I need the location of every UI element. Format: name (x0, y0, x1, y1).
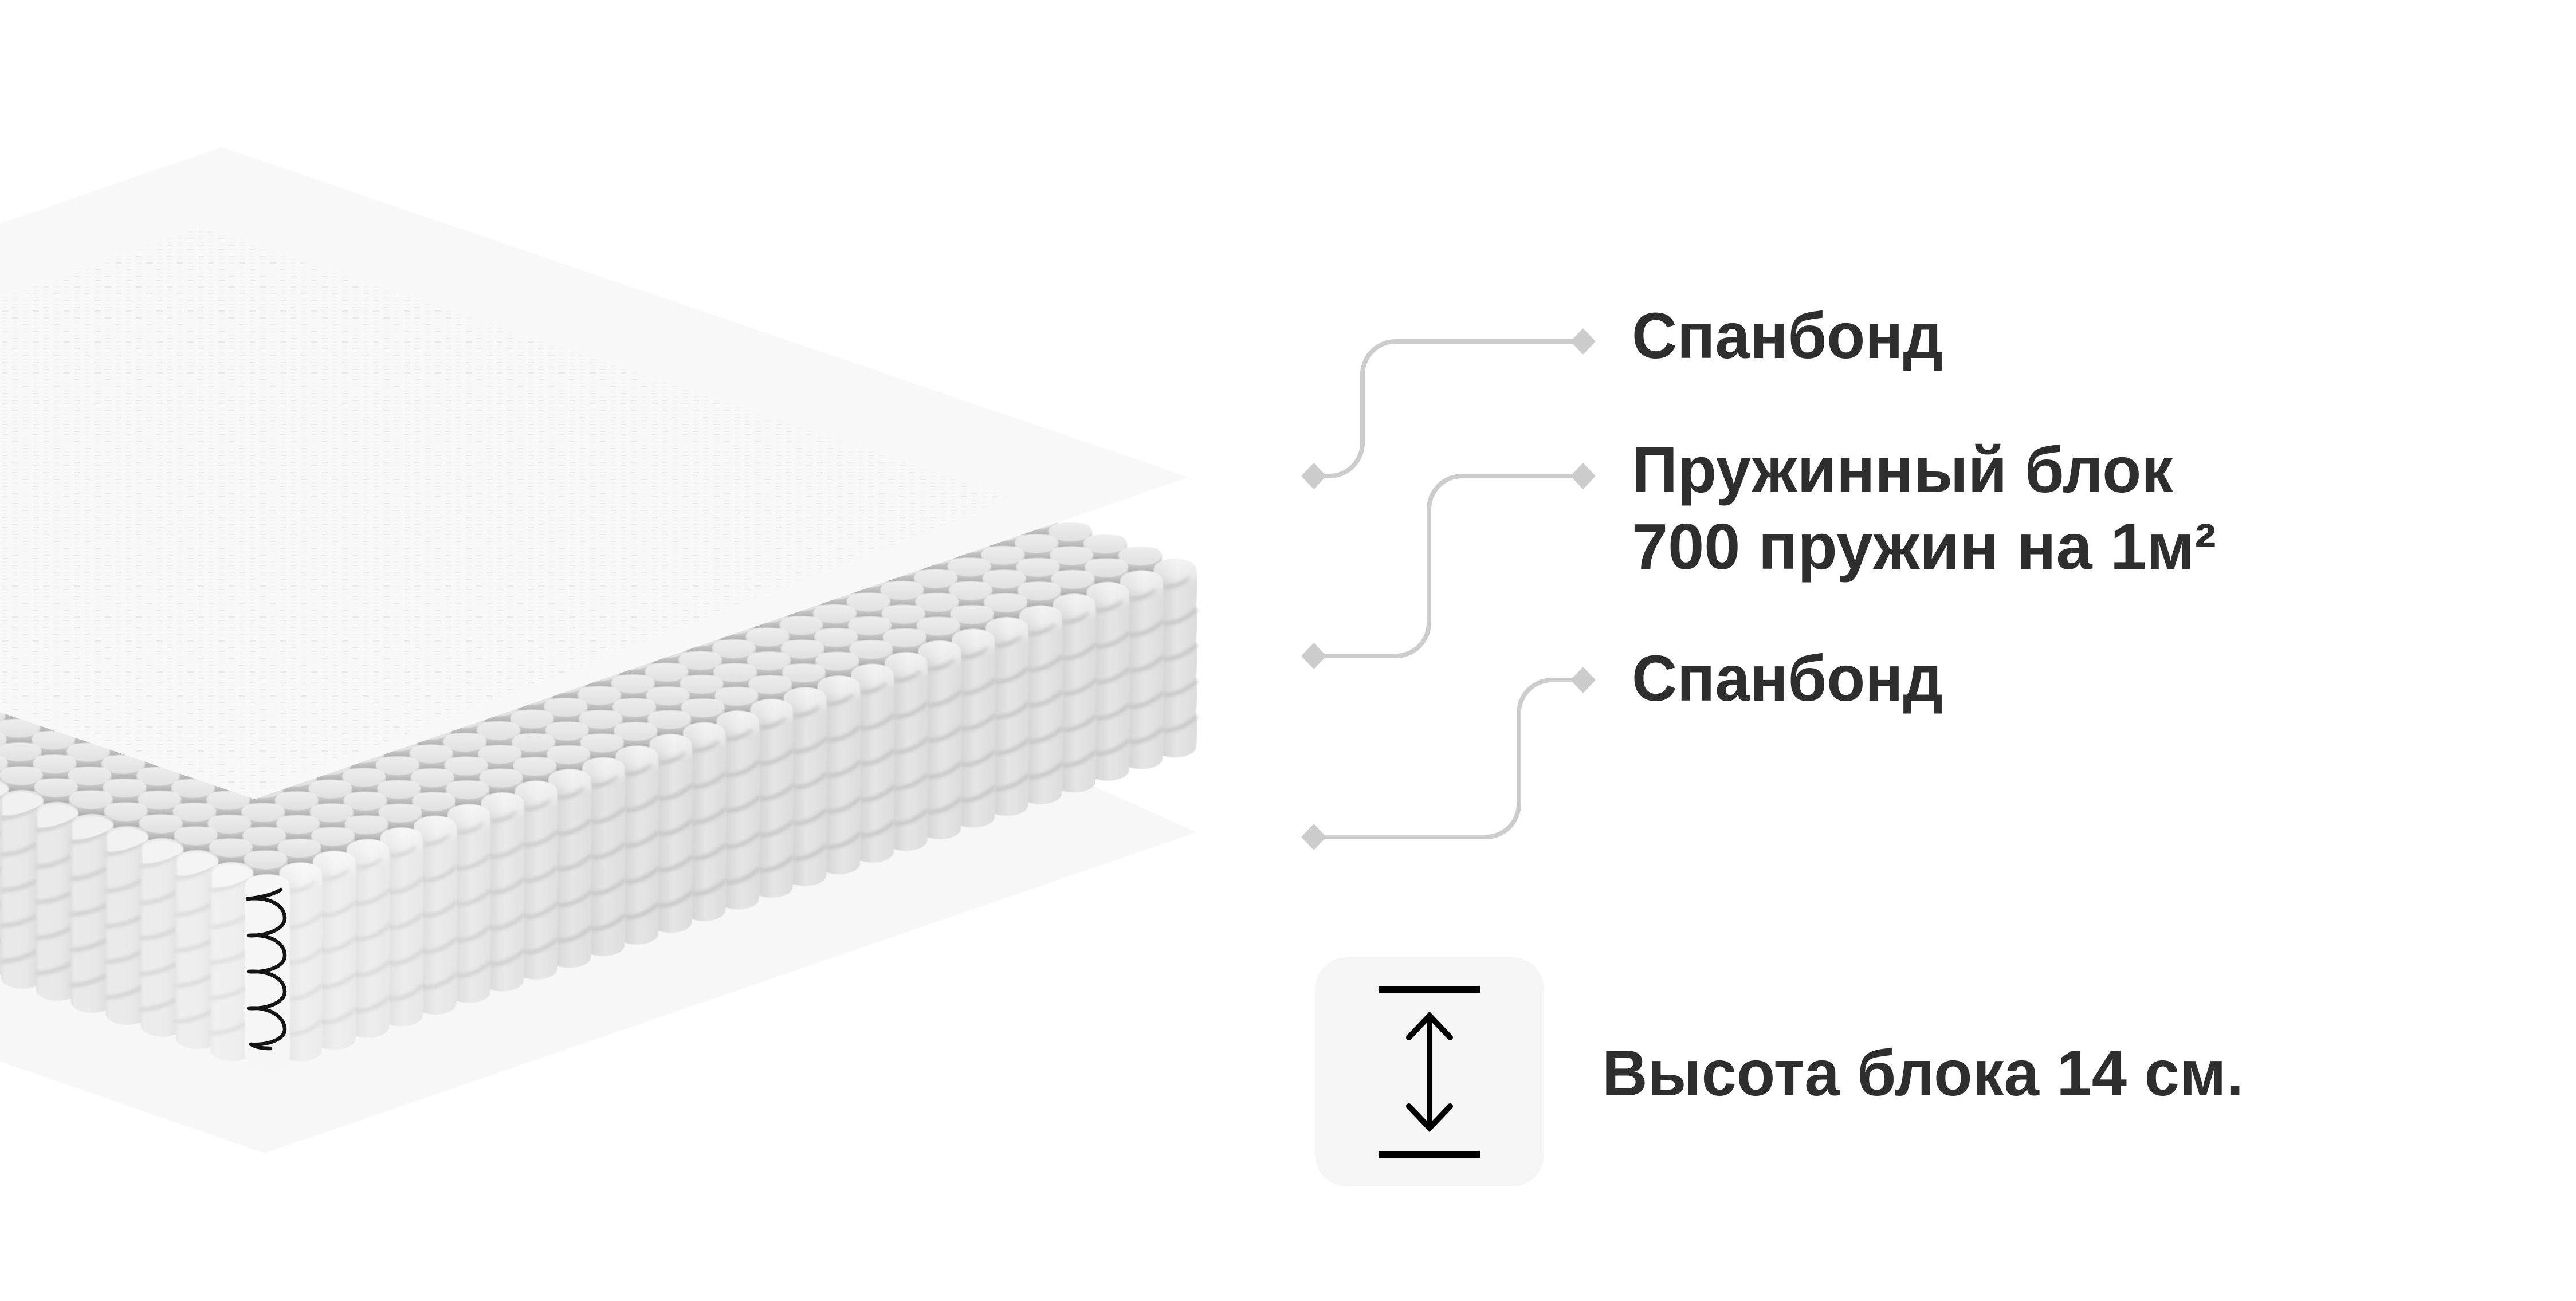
interior spring tops (0, 510, 1162, 897)
callout line: upper spunbond (1301, 328, 1596, 489)
label: block height: Высота блока 14 см. (1602, 1037, 2244, 1109)
label: spring block (1632, 434, 2216, 583)
label: spring block: 700 пружин на 1м² (1632, 510, 2216, 583)
callout line: spring block (1301, 463, 1596, 669)
pocket spring block (0, 510, 1197, 1073)
label: upper spunbond: Спанбонд (1632, 300, 1943, 372)
right face of spring pockets (278, 559, 1197, 1062)
icon card: block height (1315, 957, 1544, 1186)
upper spunbond sheet (0, 147, 1189, 799)
icon: height limit bars (1379, 986, 1480, 1158)
corner cut-open pocket (244, 874, 290, 1073)
label: lower spunbond: Спанбонд (1632, 642, 1943, 714)
lower spunbond sheet (0, 745, 1196, 1153)
label: spring block: Пружинный блок (1632, 434, 2173, 506)
icon: exposed black coil spring (248, 890, 285, 1048)
left face of spring pockets (0, 778, 254, 1061)
icon: double arrow (1409, 1016, 1450, 1128)
callout line: lower spunbond (1301, 667, 1596, 850)
